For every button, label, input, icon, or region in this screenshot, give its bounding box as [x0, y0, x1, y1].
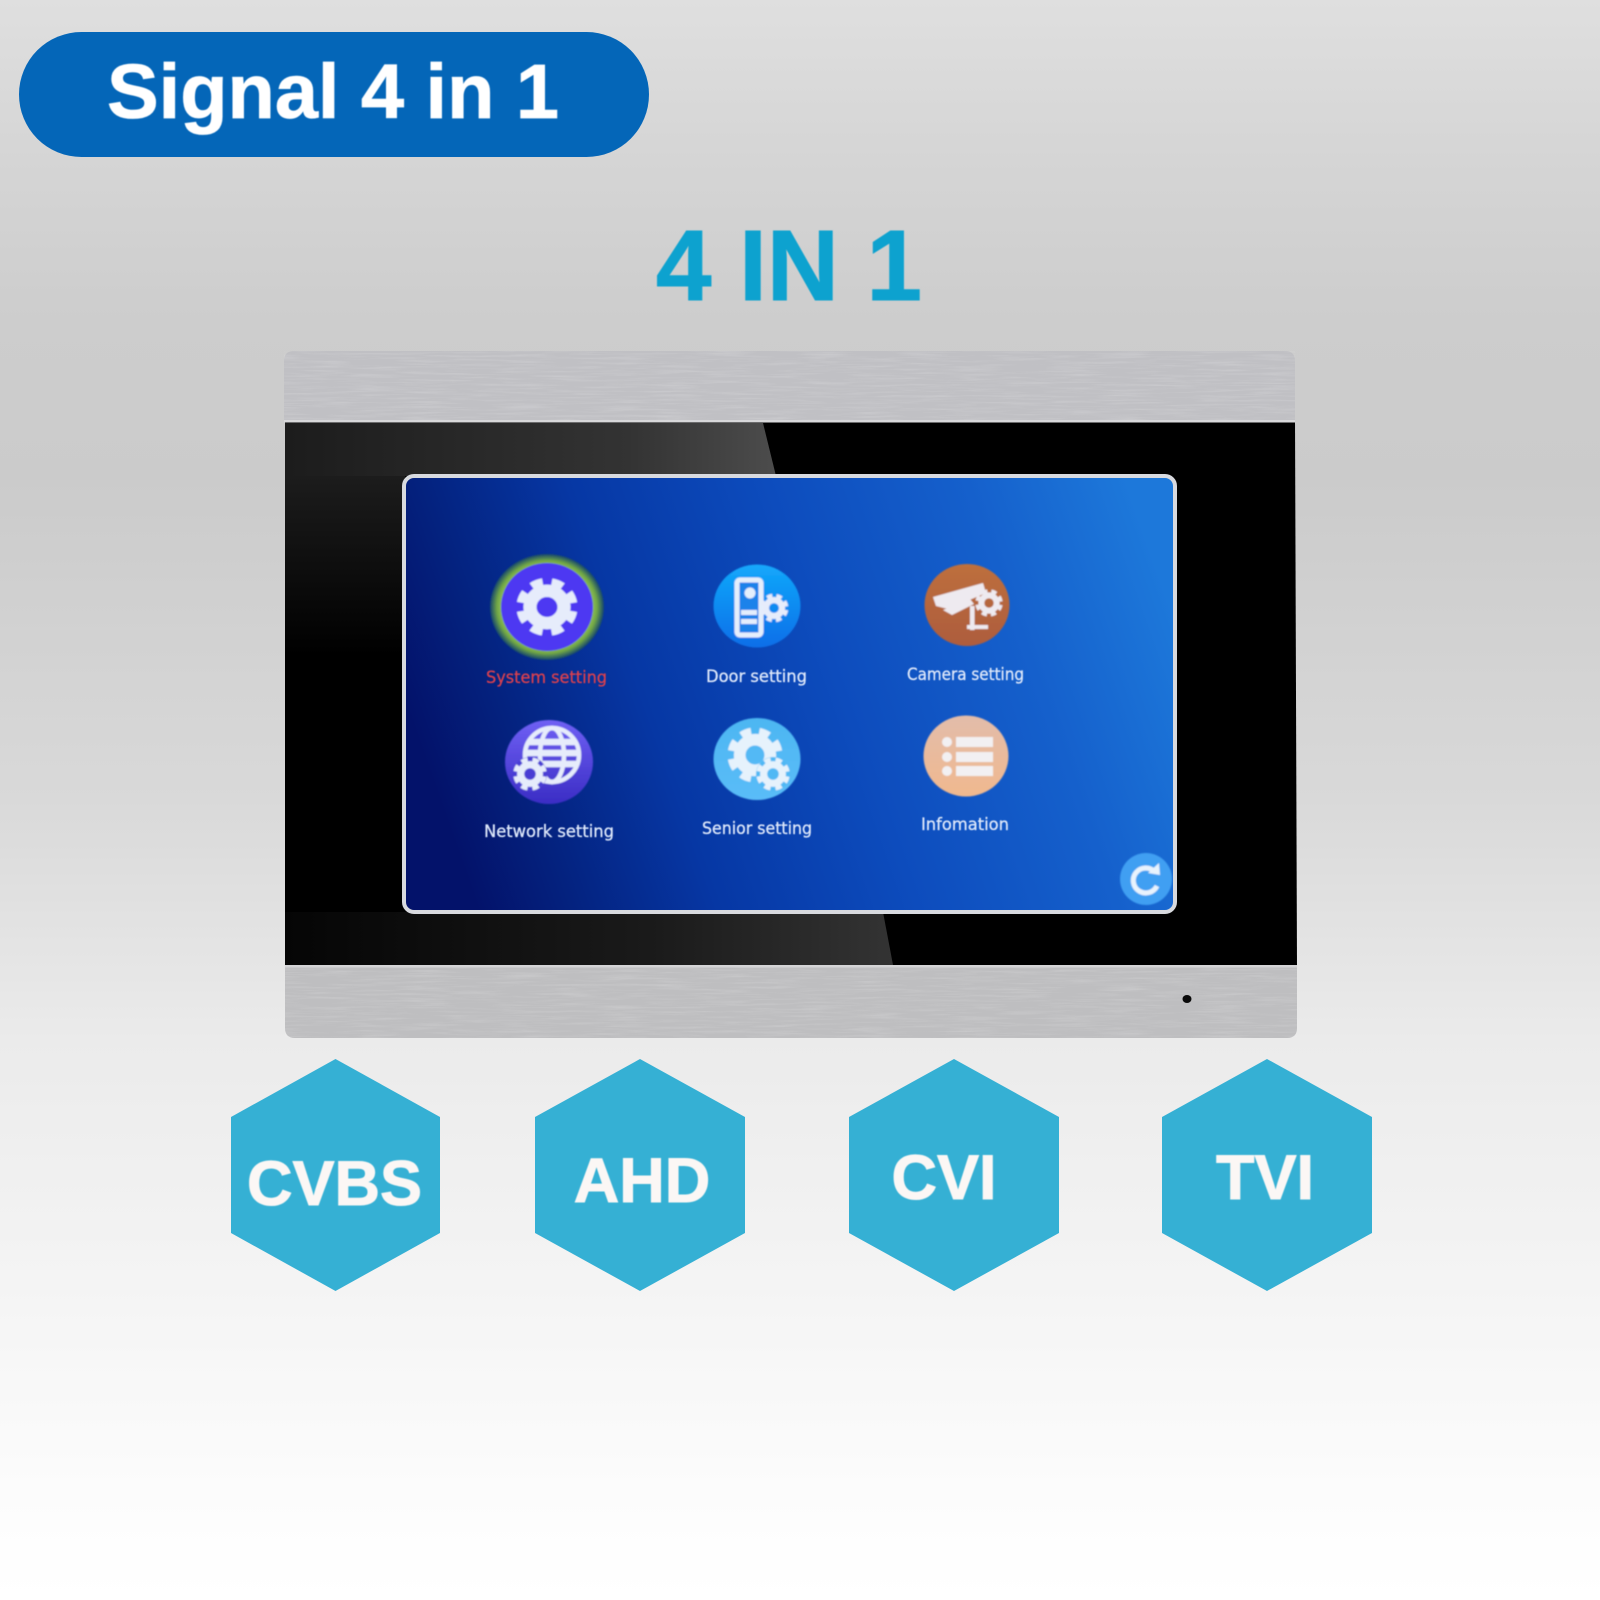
bottom metal strip with microphone hole — [285, 965, 1297, 1038]
hexagon: CVBS — [231, 1059, 440, 1291]
icon: network setting — [505, 720, 593, 804]
glass glare bottom — [285, 912, 893, 965]
hexagon: TVI: TVI — [1216, 1143, 1314, 1213]
label: Camera setting: Camera setting — [907, 665, 1024, 685]
hexagon: AHD: AHD — [574, 1146, 710, 1216]
label: Infomation: Infomation — [921, 815, 1009, 835]
hexagon: CVI: CVI — [891, 1143, 997, 1213]
heading badge: Signal 4 in 1: Signal 4 in 1 — [107, 49, 559, 135]
icon: door setting — [714, 564, 800, 648]
title: 4 IN 1: 4 IN 1 — [656, 210, 922, 322]
hexagon: CVBS: CVBS — [247, 1149, 422, 1219]
label: Door setting: Door setting — [706, 667, 807, 687]
screen frame and wallpaper — [404, 476, 1175, 912]
icon: camera setting — [924, 564, 1010, 646]
top metal strip — [284, 351, 1295, 422]
icon: system setting — [490, 554, 604, 660]
label: Network setting: Network setting — [484, 822, 614, 842]
hexagon: CVI — [849, 1059, 1059, 1291]
hexagon: TVI — [1162, 1059, 1372, 1291]
microphone hole — [1182, 995, 1192, 1003]
heading badge: Signal 4 in 1 — [19, 32, 649, 157]
glass glare top — [285, 423, 776, 476]
hexagon: AHD — [535, 1059, 745, 1291]
glass glare left fade — [285, 476, 405, 656]
panel: intercom monitor — [284, 351, 1297, 1038]
icon: senior setting — [714, 718, 800, 800]
touch screen — [404, 476, 1175, 912]
label: System setting: System setting — [486, 668, 607, 688]
icon: information — [924, 716, 1008, 796]
icon: refresh button — [1120, 853, 1172, 905]
label: Senior setting: Senior setting — [702, 819, 812, 839]
monitor black glass front — [285, 420, 1297, 968]
